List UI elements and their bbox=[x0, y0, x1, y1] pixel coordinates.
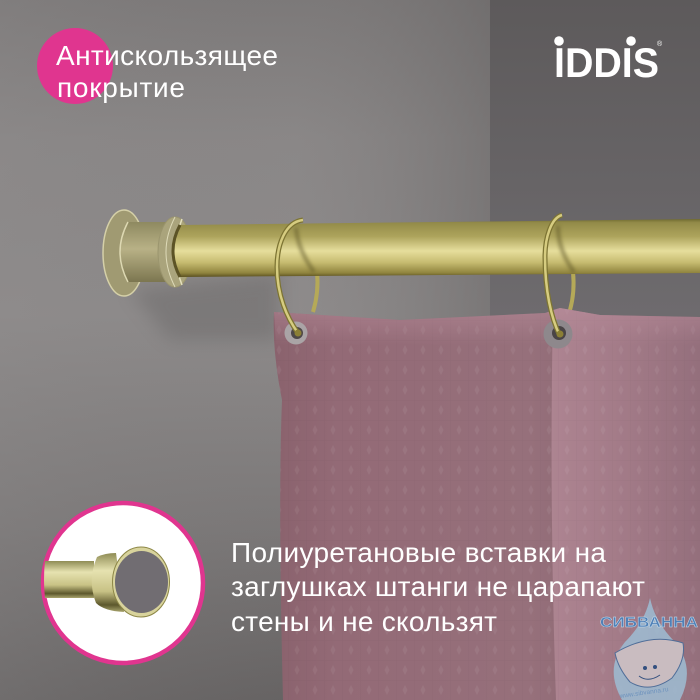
eyelet left bbox=[284, 322, 308, 344]
watermark: Sibvanna: СИБВАННА bbox=[600, 615, 699, 631]
front curtain ring right bbox=[545, 215, 564, 338]
watermark: Sibvanna: www.sibvanna.ru bbox=[618, 686, 669, 700]
eyelet right bbox=[544, 320, 572, 348]
wall mount flange bbox=[103, 210, 192, 296]
front curtain ring left bbox=[277, 220, 303, 336]
back of curtain rings bbox=[313, 272, 574, 312]
heading: anti-slip coating: покрытие bbox=[57, 72, 185, 103]
IDDIS logo: ® bbox=[657, 40, 663, 48]
IDDIS logo: IDDIS bbox=[554, 39, 659, 86]
inset cap bbox=[112, 547, 170, 617]
inset circle: rod end cap bbox=[43, 503, 203, 663]
inset rod bbox=[44, 561, 94, 598]
caption line one: Полиуретановые вставки на bbox=[231, 537, 606, 568]
inset collar bbox=[92, 553, 124, 612]
pink badge bbox=[37, 28, 113, 104]
curtain bbox=[274, 308, 700, 700]
rod shadow on wall bbox=[130, 272, 280, 340]
caption line three: стены и не скользят bbox=[231, 606, 497, 637]
ring shadows on rod bbox=[296, 226, 574, 272]
heading: anti-slip coating: Антискользящее bbox=[56, 40, 278, 71]
shower rod bbox=[173, 219, 700, 277]
caption line two: заглушках штанги не царапают bbox=[231, 571, 645, 602]
watermark: Sibvanna bbox=[600, 598, 699, 700]
